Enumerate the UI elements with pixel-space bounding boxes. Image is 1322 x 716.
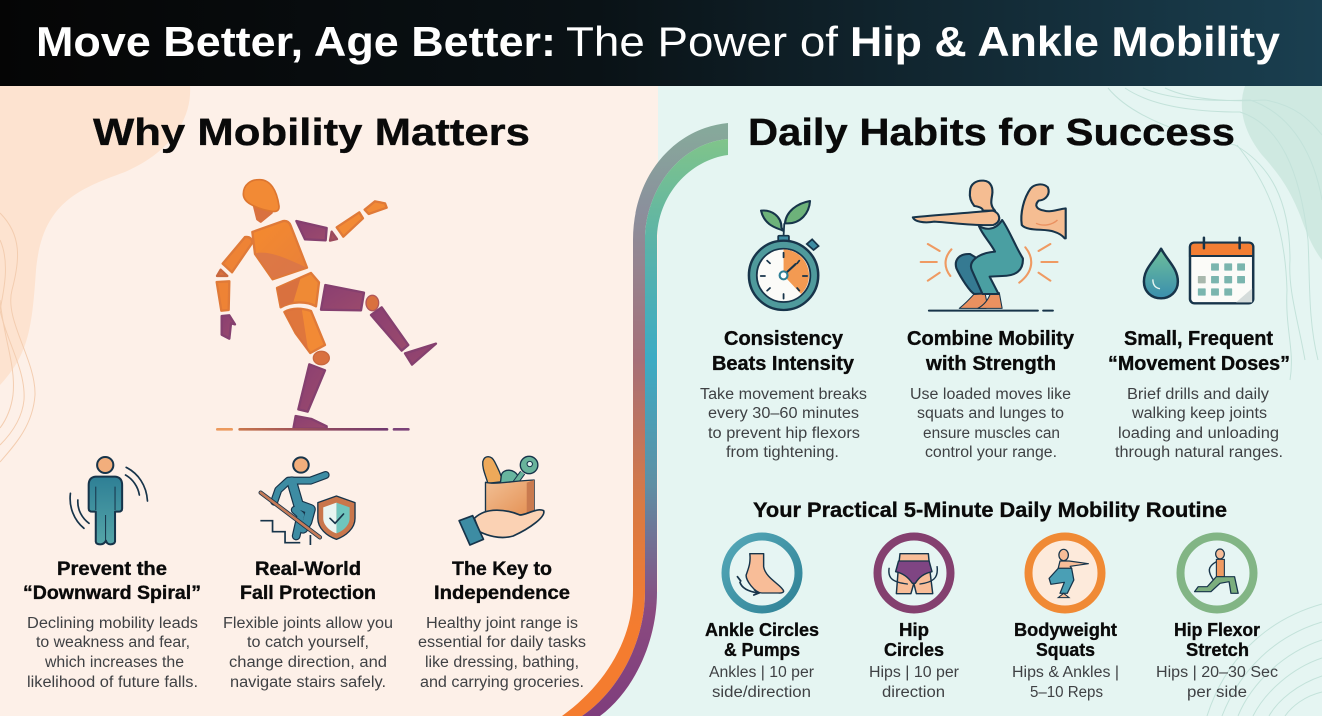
icon: bodyweight squats ring [1028, 536, 1102, 610]
text: ankle circles: Ankles | 10 per [709, 664, 814, 681]
text: small frequent movement doses: loading and unloading [1118, 425, 1279, 442]
text: key to independence: essential for daily tasks [418, 634, 586, 651]
text: ankle circles: side/direction [712, 684, 811, 701]
text: consistency beats intensity: from tightening. [726, 444, 839, 461]
text: hip flexor stretch: Hip Flexor [1174, 619, 1260, 640]
title bar: Move Better, Age Better: [36, 18, 556, 65]
text: real-world fall protection: Real-World [255, 559, 361, 580]
text: bodyweight squats: Hips & Ankles | [1012, 664, 1119, 681]
text: ankle circles [705, 619, 819, 701]
text: real-world fall protection: Fall Protection [240, 583, 376, 604]
title bar: The Power of [566, 18, 838, 65]
text: combine mobility with strength: Combine Mobility [907, 328, 1075, 350]
text: consistency beats intensity: to prevent hip flexors [708, 425, 860, 442]
heading: daily habits: Daily Habits for Success [748, 112, 1235, 154]
text: prevent the downward spiral: which increases the [44, 654, 184, 671]
text: prevent the downward spiral: “Downward Spiral” [23, 583, 201, 604]
title bar [0, 0, 1322, 86]
right decorative blob [1242, 86, 1322, 260]
text: small frequent movement doses [1108, 328, 1290, 461]
heading: why mobility matters: Why Mobility Matters [93, 112, 530, 154]
text: real-world fall protection: Flexible joints allow you [223, 615, 393, 632]
heading: five-minute routine: Your Practical 5-Minute Daily Mobility Routine [753, 499, 1227, 522]
text: real-world fall protection [223, 559, 393, 691]
text: prevent the downward spiral: to weakness and fear, [36, 634, 190, 651]
text: bodyweight squats [1012, 619, 1119, 701]
text: hip circles: direction [882, 684, 945, 701]
text: hip circles: Hips | 10 per [869, 664, 959, 681]
text: prevent the downward spiral: Declining mobility leads [27, 615, 198, 632]
text: combine mobility with strength: control your range. [925, 444, 1057, 461]
text: hip flexor stretch: Hips | 20–30 Sec [1156, 664, 1278, 681]
text: small frequent movement doses: Brief drills and daily [1127, 386, 1269, 403]
text: real-world fall protection: change direction, and [229, 654, 387, 671]
text: hip circles: Circles [884, 639, 944, 660]
text: bodyweight squats: 5–10 Reps [1030, 684, 1103, 701]
text: hip circles [869, 619, 959, 701]
text: hip flexor stretch [1156, 619, 1278, 701]
text: bodyweight squats: Bodyweight [1014, 619, 1117, 640]
text: consistency beats intensity: Consistency [724, 328, 844, 350]
text: key to independence: and carrying groceries. [420, 674, 584, 691]
text: hip flexor stretch: per side [1187, 684, 1247, 701]
text: prevent the downward spiral: likelihood of future falls. [27, 674, 198, 691]
text: small frequent movement doses: Small, Frequent [1124, 328, 1273, 350]
text: key to independence: Healthy joint range is [426, 615, 578, 632]
icon: swaying person [70, 457, 147, 544]
title bar: Hip & Ankle Mobility [850, 18, 1281, 65]
text: hip circles: Hip [899, 619, 929, 640]
text: key to independence [418, 559, 586, 691]
text: consistency beats intensity: Beats Intensity [712, 353, 855, 375]
text: ankle circles: & Pumps [724, 639, 800, 660]
text: consistency beats intensity [700, 328, 867, 461]
icon: hand holding groceries [459, 456, 544, 545]
text: prevent the downward spiral: Prevent the [57, 559, 167, 580]
text: prevent the downward spiral [23, 559, 201, 691]
text: key to independence: Independence [434, 583, 570, 604]
icon: ankle circles ring [726, 536, 798, 610]
text: small frequent movement doses: through natural ranges. [1115, 444, 1283, 461]
text: combine mobility with strength: with Strength [925, 353, 1056, 375]
icon: stopwatch with leaves [749, 201, 819, 310]
right panel background [600, 86, 1322, 716]
curved divider [562, 123, 728, 716]
text: real-world fall protection: to catch yourself, [247, 634, 369, 651]
icon: water drop and calendar [1144, 238, 1253, 303]
left panel background [0, 86, 660, 716]
text: combine mobility with strength [907, 328, 1075, 461]
icon: hip flexor stretch ring [1180, 536, 1254, 610]
text: bodyweight squats: Squats [1036, 639, 1095, 660]
text: consistency beats intensity: every 30–60 minutes [708, 405, 859, 422]
text: small frequent movement doses: “Movement Doses” [1108, 353, 1290, 375]
text: combine mobility with strength: Use loaded moves like [910, 386, 1071, 403]
text: combine mobility with strength: squats and lunges to [917, 405, 1064, 422]
left decorative blob [0, 86, 190, 385]
text: hip flexor stretch: Stretch [1186, 639, 1249, 660]
text: consistency beats intensity: Take movement breaks [700, 386, 867, 403]
text: ankle circles: Ankle Circles [705, 619, 819, 640]
text: key to independence: like dressing, bathing, [425, 654, 579, 671]
icon: squat with flexed bicep [913, 181, 1066, 311]
text: small frequent movement doses: walking keep joints [1131, 405, 1267, 422]
text: key to independence: The Key to [452, 559, 552, 580]
text: real-world fall protection: navigate stairs safely. [230, 674, 386, 691]
figure: articulated mannequin losing balance [217, 180, 436, 431]
icon: hip circles ring [878, 536, 950, 610]
icon: stair fall protection [260, 457, 355, 545]
text: combine mobility with strength: ensure muscles can [923, 425, 1060, 442]
